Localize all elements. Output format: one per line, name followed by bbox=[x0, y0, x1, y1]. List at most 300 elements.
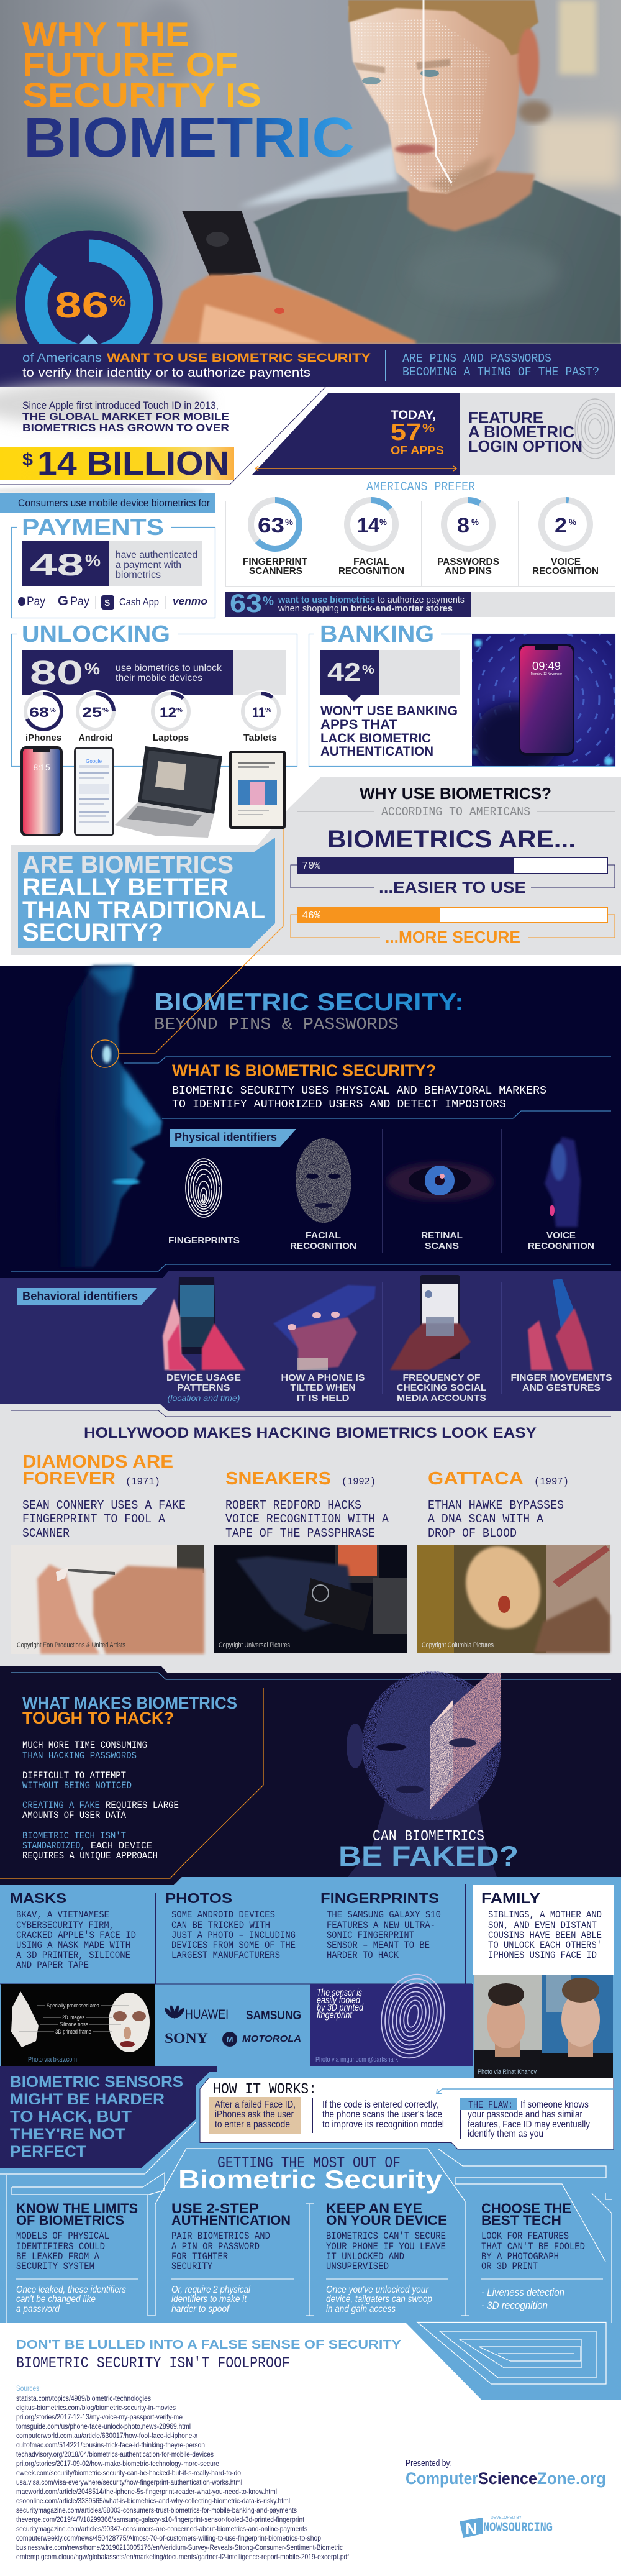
column: masks: CYBERSECURITY FIRM, bbox=[16, 1920, 114, 1931]
tip: keep an eye on your device: ON YOUR DEVICE bbox=[326, 2213, 447, 2228]
closing statement: BIOMETRIC SECURITY ISN'T FOOLPROOF bbox=[16, 2354, 290, 2372]
sources list: statista.com/topics/4989/biometric-technologies bbox=[16, 2394, 151, 2403]
marble texture behind market stat bbox=[0, 382, 325, 495]
icon: tablet bbox=[229, 751, 286, 829]
column: family: FAMILY bbox=[481, 1890, 540, 1906]
text: what makes biometrics tough to hack bbox=[22, 1694, 237, 1861]
sources list: macworld.com/article/2048514/the-iphone-5s-fingerprint-reader-what-you-need-to-know.html bbox=[16, 2487, 277, 2496]
sources list: theverge.com/2019/4/7/18299366/samsung-galaxy-s10-fingerprint-sensor-fooled-3d-printed-fingerprint bbox=[16, 2515, 305, 2524]
heading: getting the most out of biometric security bbox=[178, 2154, 443, 2194]
stat panel: 57 percent of apps: 57 bbox=[391, 419, 422, 445]
behavioral: frequency of checking social bbox=[390, 1275, 487, 1404]
heading: biometric security: BEYOND PINS & PASSWORDS bbox=[154, 1016, 399, 1035]
stat: 42 percent: % bbox=[362, 663, 374, 677]
logos: phone manufacturers: M bbox=[227, 2035, 233, 2044]
ring: voice recognition 2 percent: VOICE bbox=[551, 557, 581, 567]
sources list: computerworld.com.au/article/630017/how-fool-face-id-iphone-x bbox=[16, 2431, 197, 2440]
step: failed Face ID bbox=[209, 2097, 301, 2134]
ring: Laptops 12 percent: Laptops bbox=[153, 733, 189, 743]
tip: keep an eye on your device: BIOMETRICS CAN'T SECURE bbox=[326, 2231, 446, 2242]
tip: use 2-step authentication: identifiers to make it bbox=[171, 2294, 247, 2304]
band: 86 percent caption: of Americans bbox=[22, 352, 102, 365]
ring: passwords and pins 8 percent: 8 bbox=[457, 514, 469, 537]
closing statement bbox=[16, 2338, 402, 2372]
sources list: cultofmac.com/514221/cousins-trick-face-id-thinking-theyre-person bbox=[16, 2441, 205, 2449]
tip: choose the best tech: LOOK FOR FEATURES bbox=[481, 2231, 569, 2242]
image: phone on fingerprint background: Monday, 13 November bbox=[531, 672, 562, 676]
image: mask diagram: 3D printed frame bbox=[55, 2029, 91, 2035]
step: failed Face ID: iPhones ask the user bbox=[215, 2109, 294, 2120]
logos: phone manufacturers: MOTOROLA bbox=[242, 2034, 301, 2044]
step: failed Face ID: to enter a passcode bbox=[215, 2119, 290, 2130]
tip: know the limits of biometrics: Once leaked, these identifiers bbox=[16, 2285, 126, 2295]
heading: can biometrics be faked bbox=[338, 1829, 519, 1872]
closing statement: DON'T BE LULLED INTO A FALSE SENSE OF SECURITY bbox=[16, 2338, 402, 2352]
text: what makes biometrics tough to hack: REQUIRES LARGE bbox=[106, 1800, 179, 1811]
tip: use 2-step authentication: FOR TIGHTER bbox=[171, 2251, 228, 2262]
title: WHY THE bbox=[22, 15, 189, 53]
tip: keep an eye on your device: Once you've unlocked your bbox=[326, 2285, 429, 2295]
text: what makes biometrics tough to hack: DIFFICULT TO ATTEMPT bbox=[22, 1770, 126, 1781]
column: photos bbox=[163, 1890, 301, 2047]
section background: dark physical identifiers bbox=[0, 966, 621, 1278]
sources list bbox=[16, 2384, 350, 2561]
panel: why use biometrics: BIOMETRICS ARE... bbox=[327, 826, 576, 853]
sources list: businesswire.com/news/home/20190213005176/en/Veridium-Survey-Reveals-Strong-Consumer-Sentiment-Biometric bbox=[16, 2543, 343, 2552]
physical: retinal scans: RETINAL bbox=[421, 1230, 463, 1241]
tip: use 2-step authentication: SECURITY bbox=[171, 2261, 213, 2272]
stat: 80 percent: 80 bbox=[30, 654, 83, 692]
market stat: 14 billion: 14 BILLION bbox=[37, 445, 229, 482]
sources list: emtemp.gcom.cloud/ngw/globalassets/en/marketing/documents/gartner-l2-intelligence-report-mobile-2019-excerpt.pdf bbox=[16, 2552, 350, 2561]
sources list: csoonline.com/article/3339565/what-is-biometrics-and-why-collecting-biometric-data-is-risky.html bbox=[16, 2496, 290, 2505]
movie: Diamonds Are Forever: DIAMONDS ARE bbox=[22, 1452, 173, 1472]
tip: use 2-step authentication: AUTHENTICATION bbox=[171, 2213, 291, 2228]
text: what makes biometrics tough to hack: CREATING A FAKE bbox=[22, 1800, 100, 1811]
callout: are biometrics really better: ARE BIOMETRICS bbox=[22, 851, 233, 879]
ring: Tablets 11 percent bbox=[240, 690, 282, 743]
behavioral: device usage patterns: DEVICE USAGE bbox=[166, 1372, 241, 1383]
callout: biometric sensors might be harder to hack: MIGHT BE HARDER bbox=[10, 2091, 165, 2108]
movie: Gattaca: (1997) bbox=[534, 1476, 569, 1488]
column: fingerprints: FEATURES A NEW ULTRA- bbox=[327, 1920, 435, 1931]
ring: fingerprint scanners 63 percent bbox=[243, 500, 308, 577]
panel: why use biometrics: WHY USE BIOMETRICS? bbox=[360, 784, 551, 803]
grey panel background: why use biometrics bbox=[11, 777, 621, 955]
payment logos: G bbox=[58, 594, 68, 608]
tip: keep an eye on your device: YOUR PHONE IF YOU LEAVE bbox=[326, 2241, 446, 2252]
ring: Android 25 percent: % bbox=[102, 707, 109, 714]
movie: Diamonds Are Forever: (1971) bbox=[125, 1476, 160, 1488]
image: 3D printed fingerprint bbox=[310, 1968, 473, 2066]
behavioral: finger movements and gestures bbox=[510, 1279, 612, 1393]
column: family: SON, AND EVEN DISTANT bbox=[488, 1920, 597, 1931]
image: 3D printed fingerprint: easily fooled bbox=[317, 1995, 361, 2006]
heading: banking: BANKING bbox=[320, 621, 434, 647]
image: dotted face with revealed shard bbox=[347, 1671, 501, 1877]
text: what makes biometrics tough to hack: REQUIRES A UNIQUE APPROACH bbox=[22, 1850, 158, 1861]
image: mask diagram: Silicone nose bbox=[60, 2021, 88, 2028]
callout: biometric sensors might be harder to hack: BIOMETRIC SENSORS bbox=[10, 2073, 183, 2091]
band: 86 percent caption: to verify their identity or to authorize payments bbox=[22, 367, 310, 380]
ring: facial recognition 14 percent: % bbox=[379, 517, 388, 527]
heading: Hollywood makes hacking biometrics look easy: HOLLYWOOD MAKES HACKING BIOMETRICS LOOK EASY bbox=[84, 1425, 537, 1441]
stat: 48 percent: biometrics bbox=[116, 570, 161, 580]
callout: 63 percent brick-and-mortar bbox=[225, 588, 615, 618]
image: fake fingerprint on finger: Copyright Eon Productions & United Artists bbox=[17, 1642, 125, 1649]
behavioral: finger movements and gestures: AND GESTURES bbox=[522, 1382, 601, 1393]
step: the flaw bbox=[460, 2098, 590, 2139]
column: family: COUSINS HAVE BEEN ABLE bbox=[488, 1930, 602, 1941]
behavioral: how a phone is tilted bbox=[273, 1285, 376, 1404]
presented by: ComputerScienceZone.org bbox=[406, 2458, 606, 2488]
column: photos: SOME ANDROID DEVICES bbox=[171, 1909, 275, 1921]
image: blood drop on fake finger bbox=[417, 1534, 610, 1653]
image: family card background bbox=[473, 1885, 614, 1975]
bar: 46 percent more secure bbox=[291, 907, 615, 946]
ring: fingerprint scanners 63 percent: FINGERPRINT bbox=[243, 557, 308, 567]
payment logos: $ bbox=[104, 598, 111, 608]
icon: iPhone bbox=[20, 746, 63, 836]
movie: Diamonds Are Forever: FOREVER bbox=[22, 1469, 116, 1489]
tip: choose the best tech: - 3D recognition bbox=[481, 2300, 548, 2311]
image: 3D printed fingerprint: by 3D printed bbox=[317, 2003, 364, 2013]
sources list: pri.org/stories/2017-09-02/how-make-biometric-technology-more-secure bbox=[16, 2459, 219, 2468]
text: what makes biometrics tough to hack: BIOMETRIC TECH ISN'T bbox=[22, 1830, 126, 1842]
panel: how it works bbox=[200, 2078, 614, 2149]
ring: fingerprint scanners 63 percent: SCANNERS bbox=[249, 566, 302, 577]
tip: choose the best tech bbox=[481, 2201, 603, 2311]
movie: Diamonds Are Forever bbox=[11, 1452, 204, 1654]
column: masks: AND PAPER TAPE bbox=[16, 1960, 89, 1971]
image: hand holding tape recorder bbox=[214, 1545, 407, 1653]
heading: getting the most out of biometric security: Biometric Security bbox=[178, 2165, 443, 2194]
ring: Android 25 percent: 25 bbox=[82, 705, 102, 720]
movie: Gattaca: DROP OF BLOOD bbox=[428, 1527, 517, 1540]
tip: keep an eye on your device: IT UNLOCKED AND bbox=[326, 2251, 404, 2262]
market stat: 14 billion: Since Apple first introduced Touch ID in 2013, bbox=[22, 400, 219, 411]
gauge: 86 percent: 86 bbox=[55, 285, 109, 326]
heading: payments: PAYMENTS bbox=[22, 514, 164, 540]
band: 86 percent caption: ARE PINS AND PASSWORDS bbox=[402, 352, 551, 365]
ring: Laptops 12 percent: % bbox=[176, 707, 183, 714]
logos: phone manufacturers: SONY bbox=[165, 2030, 208, 2046]
tip: choose the best tech: - Liveness detection bbox=[481, 2286, 564, 2298]
physical: fingerprints: FINGERPRINTS bbox=[168, 1235, 240, 1246]
column: photos: CAN BE TRICKED WITH bbox=[171, 1920, 270, 1931]
presented by: ComputerScienceZone.org: Presented by: bbox=[406, 2458, 452, 2469]
tip: keep an eye on your device bbox=[326, 2201, 448, 2314]
ring: iPhones 68 percent: % bbox=[50, 707, 56, 714]
step: failed Face ID: After a failed Face ID, bbox=[215, 2099, 296, 2110]
heading: can biometrics be faked: BE FAKED? bbox=[338, 1840, 519, 1872]
panel: banking bbox=[308, 625, 616, 767]
image: mask diagram: Specially processed area bbox=[47, 2003, 100, 2009]
ring: passwords and pins 8 percent: PASSWORDS bbox=[437, 557, 499, 567]
callout: 63 percent brick-and-mortar: in brick-and-mortar stores bbox=[340, 604, 453, 614]
behavioral: device usage patterns bbox=[163, 1277, 245, 1403]
panel: why use biometrics bbox=[291, 784, 615, 946]
behavioral: frequency of checking social: MEDIA ACCOUNTS bbox=[397, 1393, 486, 1404]
stat panel: 57 percent of apps: TODAY, bbox=[391, 409, 436, 422]
tip: know the limits of biometrics: BE LEAKED FROM A bbox=[16, 2251, 100, 2262]
logo: NowSourcing: DEVELOPED BY bbox=[491, 2516, 522, 2520]
arrow bbox=[437, 2089, 614, 2094]
sources list: techadvisory.org/2018/04/biometrics-authentication-for-mobile-devices bbox=[16, 2450, 214, 2459]
tip: use 2-step authentication: PAIR BIOMETRICS AND bbox=[171, 2231, 270, 2242]
text: what makes biometrics tough to hack: AMOUNTS OF USER DATA bbox=[22, 1810, 127, 1821]
heading: getting the most out of biometric security: GETTING THE MOST OUT OF bbox=[217, 2154, 401, 2172]
callout: biometric sensors might be harder to hack bbox=[0, 2066, 217, 2168]
tip: use 2-step authentication: A PIN OR PASSWORD bbox=[171, 2241, 260, 2252]
ring: Tablets 11 percent: Tablets bbox=[243, 733, 277, 743]
stat: 48 percent: have authenticated bbox=[116, 550, 197, 560]
tip: choose the best tech: CHOOSE THE bbox=[481, 2201, 571, 2216]
panel: unlocking bbox=[11, 621, 297, 767]
heading: can biometrics be faked: CAN BIOMETRICS bbox=[373, 1829, 484, 1845]
ring: Laptops 12 percent: 12 bbox=[160, 705, 176, 720]
image: phone on fingerprint background bbox=[472, 634, 615, 766]
image: hands holding phone bbox=[163, 1277, 245, 1370]
image: eye bbox=[387, 1163, 492, 1200]
stat: 48 percent: % bbox=[85, 551, 101, 570]
stat: 80 percent bbox=[22, 650, 286, 695]
behavioral: frequency of checking social: CHECKING SOCIAL bbox=[396, 1382, 487, 1393]
image: face profile with eye scan bbox=[56, 966, 162, 1267]
panel: how it works: HOW IT WORKS: bbox=[213, 2081, 317, 2098]
ring: fingerprint scanners 63 percent: 63 bbox=[258, 514, 284, 537]
column: fingerprints: SONIC FINGERPRINT bbox=[327, 1930, 414, 1941]
callout: 63 percent brick-and-mortar: % bbox=[263, 595, 274, 608]
ring: facial recognition 14 percent: RECOGNITION bbox=[338, 566, 404, 577]
heading: biometric security bbox=[154, 989, 464, 1035]
ring: facial recognition 14 percent: FACIAL bbox=[353, 557, 389, 567]
physical: voice recognition: RECOGNITION bbox=[528, 1241, 594, 1251]
icon: fingerprint bbox=[186, 1159, 222, 1217]
image: fake fingerprint on finger bbox=[11, 1545, 204, 1654]
chart: preference rings bbox=[226, 497, 615, 587]
movie: Sneakers: ROBERT REDFORD HACKS bbox=[225, 1499, 361, 1512]
callout: 63 percent brick-and-mortar: want to use biometrics bbox=[278, 595, 375, 605]
column: masks: CRACKED APPLE'S FACE ID bbox=[16, 1930, 136, 1941]
text: what makes biometrics tough to hack: STANDARDIZED, bbox=[22, 1840, 85, 1852]
image: 3D printed fingerprint: fingerprint bbox=[317, 2010, 353, 2021]
ring: iPhones 68 percent: iPhones bbox=[25, 733, 61, 743]
ring: passwords and pins 8 percent: AND PINS bbox=[445, 566, 492, 577]
column: photos: JUST A PHOTO – INCLUDING bbox=[171, 1930, 296, 1941]
text: what is biometric security: TO IDENTIFY AUTHORIZED USERS AND DETECT IMPOSTORS bbox=[172, 1098, 506, 1111]
tip: use 2-step authentication: Or, require 2 physical bbox=[171, 2285, 250, 2295]
callout: biometric sensors might be harder to hack: PERFECT bbox=[10, 2143, 86, 2160]
column: masks: MASKS bbox=[10, 1890, 66, 1906]
panel: why use biometrics: ACCORDING TO AMERICANS bbox=[381, 805, 530, 819]
callout: are biometrics really better: THAN TRADITIONAL bbox=[22, 897, 265, 924]
movie: Diamonds Are Forever: FINGERPRINT TO FOOL A bbox=[22, 1512, 166, 1526]
image: two hands near phone bbox=[528, 1279, 593, 1370]
ring: Laptops 12 percent bbox=[150, 690, 192, 743]
market stat: 14 billion bbox=[0, 400, 234, 482]
panel: payments bbox=[11, 514, 215, 618]
image: mask diagram: Photo via bkav.com bbox=[28, 2056, 77, 2063]
column: family bbox=[474, 1890, 613, 2078]
ring: Tablets 11 percent: 11 bbox=[252, 705, 265, 720]
ring: voice recognition 2 percent: 2 bbox=[555, 514, 567, 537]
tip: use 2-step authentication bbox=[171, 2201, 294, 2314]
text: what makes biometrics tough to hack: EACH DEVICE bbox=[91, 1840, 152, 1852]
ring: facial recognition 14 percent: 14 bbox=[357, 514, 379, 537]
movie: Sneakers: SNEAKERS bbox=[225, 1469, 331, 1489]
text: won't use banking apps: WON'T USE BANKING bbox=[320, 704, 458, 718]
column: fingerprints bbox=[310, 1890, 473, 2066]
ring: fingerprint scanners 63 percent: % bbox=[285, 517, 294, 527]
ring: Tablets 11 percent: % bbox=[265, 707, 271, 714]
movie: Diamonds Are Forever: SCANNER bbox=[22, 1527, 70, 1540]
bar: consumers use biometrics for bbox=[0, 493, 215, 513]
behavioral: device usage patterns: (location and time) bbox=[168, 1393, 240, 1403]
callout: biometric sensors might be harder to hack: TO HACK, BUT bbox=[10, 2108, 132, 2126]
step: the flaw: If someone knows bbox=[520, 2099, 589, 2110]
sources list: tomsguide.com/us/phone-face-unlock-photo,news-28969.html bbox=[16, 2422, 191, 2431]
tag: behavioral identifiers bbox=[17, 1288, 157, 1305]
image: hand holding tape recorder: Copyright Universal Pictures bbox=[219, 1642, 290, 1649]
text: what makes biometrics tough to hack: TOUGH TO HACK? bbox=[22, 1709, 174, 1727]
tip: know the limits of biometrics: can't be changed like bbox=[16, 2294, 96, 2304]
physical: facial recognition: FACIAL bbox=[306, 1230, 341, 1241]
tip: know the limits of biometrics bbox=[16, 2201, 138, 2314]
heading: unlocking: UNLOCKING bbox=[22, 621, 170, 647]
sources list: Sources: bbox=[16, 2384, 41, 2393]
logos: phone manufacturers: HUAWEI bbox=[185, 2007, 229, 2022]
column: masks bbox=[1, 1890, 155, 2066]
stat: 80 percent: % bbox=[84, 659, 100, 678]
ring: voice recognition 2 percent bbox=[532, 500, 599, 577]
sources list: pri.org/stories/2017-12-13/my-voice-my-passport-verify-me bbox=[16, 2413, 183, 2421]
step: the flaw: features, Face ID may eventually bbox=[468, 2119, 590, 2130]
step: the flaw: your passcode and has similar bbox=[468, 2109, 582, 2120]
image: woman profile bbox=[545, 1137, 581, 1227]
column: photos: DEVICES FROM SOME OF THE bbox=[171, 1940, 296, 1951]
section background: tough to hack bbox=[0, 1666, 621, 1885]
tip: choose the best tech: OR 3D PRINT bbox=[481, 2261, 538, 2272]
presented by: ComputerScienceZone.org: Computer bbox=[406, 2469, 478, 2488]
physical: retinal scans: SCANS bbox=[425, 1241, 459, 1251]
sources list: eweek.com/security/biometric-security-can-be-hacked-but-it-s-really-hard-to-do bbox=[16, 2469, 241, 2477]
tip: know the limits of biometrics: IDENTIFIERS COULD bbox=[16, 2241, 105, 2252]
bar: 46 percent more secure: 46% bbox=[302, 910, 321, 922]
stat: 80 percent: their mobile devices bbox=[116, 673, 202, 683]
bar: 70 percent easier to use: 70% bbox=[302, 861, 321, 872]
title: FUTURE OF bbox=[22, 45, 238, 84]
heading: Americans prefer: AMERICANS PREFER bbox=[366, 480, 475, 495]
tip: keep an eye on your device: KEEP AN EYE bbox=[326, 2201, 422, 2216]
ring: iPhones 68 percent: 68 bbox=[29, 705, 49, 720]
text: what makes biometrics tough to hack: MUCH MORE TIME CONSUMING bbox=[22, 1740, 147, 1751]
logos: phone manufacturers: SAMSUNG bbox=[246, 2009, 301, 2022]
callout: 63 percent brick-and-mortar: to authorize payments bbox=[378, 595, 465, 605]
text: won't use banking apps: APPS THAT bbox=[320, 718, 397, 732]
image: hand holding phone with social feed bbox=[390, 1275, 471, 1370]
callout: biometric sensors might be harder to hack: THEY'RE NOT bbox=[10, 2126, 125, 2143]
band: 86 percent caption: WANT TO USE BIOMETRIC SECURITY bbox=[107, 352, 371, 365]
movie: Sneakers: (1992) bbox=[342, 1476, 376, 1488]
heading: biometric security: BIOMETRIC SECURITY: bbox=[154, 989, 464, 1016]
payment logos: Cash App bbox=[119, 597, 159, 608]
section background: behavioral identifiers bbox=[0, 1271, 621, 1411]
text: won't use banking apps: AUTHENTICATION bbox=[320, 744, 433, 759]
tag: physical identifiers: Physical identifiers bbox=[175, 1131, 277, 1143]
stat: 80 percent: use biometrics to unlock bbox=[116, 663, 222, 674]
tip: keep an eye on your device: UNSUPERVISED bbox=[326, 2261, 389, 2272]
movie: Gattaca bbox=[417, 1469, 610, 1653]
gauge: 86 percent: % bbox=[109, 293, 126, 310]
step: code entered: the phone scans the user's face bbox=[322, 2109, 442, 2120]
step: code entered: If the code is entered correctly, bbox=[322, 2099, 438, 2110]
market stat: 14 billion: THE GLOBAL MARKET FOR MOBILE bbox=[22, 411, 229, 422]
movie: Diamonds Are Forever: SEAN CONNERY USES A FAKE bbox=[22, 1499, 186, 1512]
logo: NowSourcing: N bbox=[465, 2519, 478, 2538]
column: photos: LARGEST MANUFACTURERS bbox=[171, 1950, 280, 1961]
behavioral: how a phone is tilted: TILTED WHEN bbox=[291, 1382, 355, 1393]
title bbox=[22, 15, 355, 169]
sources list: securitymagazine.com/articles/90347-consumers-are-concerned-about-biometrics-and-online-payments bbox=[16, 2524, 307, 2533]
text: what is biometric security: BIOMETRIC SECURITY USES PHYSICAL AND BEHAVIORAL MARKERS bbox=[172, 1085, 546, 1097]
bar: 70 percent easier to use bbox=[291, 857, 615, 897]
stat panel: 57 percent of apps: A BIOMETRIC bbox=[468, 422, 574, 441]
image: two cousins: Photo via Rinat Khanov bbox=[478, 2068, 537, 2076]
sources list: usa.visa.com/visa-everywhere/security/how-fingerprint-authentication-works.html bbox=[16, 2478, 242, 2487]
tip: know the limits of biometrics: MODELS OF PHYSICAL bbox=[16, 2231, 109, 2242]
tip: choose the best tech: BEST TECH bbox=[481, 2213, 561, 2228]
tip: use 2-step authentication: USE 2-STEP bbox=[171, 2201, 259, 2216]
icon: iPhone: 8:15 bbox=[33, 762, 50, 772]
icon: laptop bbox=[115, 746, 222, 838]
ring: passwords and pins 8 percent bbox=[437, 500, 499, 577]
callout: 63 percent brick-and-mortar: 63 bbox=[230, 588, 262, 618]
text: what makes biometrics tough to hack: WHAT MAKES BIOMETRICS bbox=[22, 1694, 237, 1712]
section background: blue faking and tips bbox=[0, 1877, 621, 2400]
bar: consumers use biometrics for: Consumers use mobile device biometrics for bbox=[18, 497, 210, 509]
column: fingerprints: THE SAMSUNG GALAXY S10 bbox=[327, 1909, 441, 1921]
connector: eye scan callout line bbox=[91, 829, 283, 1067]
tip: know the limits of biometrics: OF BIOMETRICS bbox=[16, 2213, 124, 2228]
presented by: ComputerScienceZone.org: Science bbox=[478, 2469, 537, 2488]
text: won't use banking apps: LACK BIOMETRIC bbox=[320, 731, 431, 746]
ring: voice recognition 2 percent: % bbox=[569, 517, 577, 527]
ring: voice recognition 2 percent: RECOGNITION bbox=[532, 566, 599, 577]
market stat: 14 billion: $ bbox=[22, 450, 33, 469]
ring: Android 25 percent bbox=[75, 690, 117, 743]
tip: keep an eye on your device: device, tailgaters can swoop bbox=[326, 2294, 432, 2304]
bar: 70 percent easier to use: ...EASIER TO USE bbox=[379, 878, 526, 897]
physical: fingerprints bbox=[168, 1159, 240, 1246]
image: dotted face bbox=[296, 1138, 351, 1223]
movie: Gattaca: A DNA SCAN WITH A bbox=[428, 1512, 544, 1526]
tip: use 2-step authentication: harder to spoof bbox=[171, 2304, 230, 2314]
column: masks: A 3D PRINTER, SILICONE bbox=[16, 1950, 130, 1961]
tip: know the limits of biometrics: a password bbox=[16, 2304, 60, 2314]
movie: Sneakers: VOICE RECOGNITION WITH A bbox=[225, 1512, 389, 1526]
column: family: SIBLINGS, A MOTHER AND bbox=[488, 1909, 602, 1921]
movie: Gattaca: GATTACA bbox=[428, 1469, 524, 1489]
column: photos: PHOTOS bbox=[165, 1890, 232, 1906]
physical: voice recognition: VOICE bbox=[546, 1230, 576, 1241]
step: the flaw: THE FLAW: bbox=[468, 2099, 513, 2111]
behavioral: how a phone is tilted: HOW A PHONE IS bbox=[281, 1372, 365, 1383]
stat panel: 57 percent of apps: FEATURE bbox=[468, 408, 543, 427]
text: what makes biometrics tough to hack: THAN HACKING PASSWORDS bbox=[22, 1750, 137, 1761]
movie: Sneakers: TAPE OF THE PASSPHRASE bbox=[225, 1527, 375, 1540]
ring: iPhones 68 percent bbox=[22, 690, 65, 743]
